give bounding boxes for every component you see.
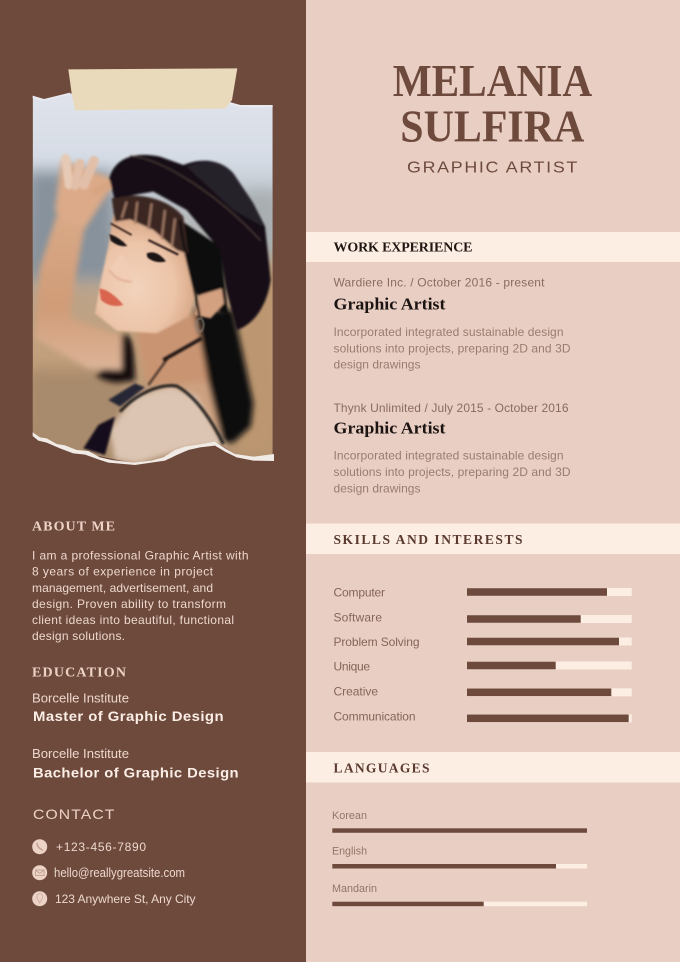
torn paper bottom edge (33, 432, 274, 465)
torn paper top edge (33, 93, 273, 108)
panel: page background (306, 0, 680, 962)
education entry: master (32, 691, 224, 724)
heading: about me: ABOUT ME (32, 520, 115, 534)
job entry: Wardiere: Incorporated integrated sustainable design (334, 325, 564, 339)
job entry: Thynk: solutions into projects, preparing 2D and 3D (334, 465, 571, 479)
text block: about me: design. Proven ability to transform (32, 597, 226, 611)
title: name (393, 55, 592, 152)
section band: work experience: WORK EXPERIENCE (334, 240, 472, 255)
job entry: Wardiere (334, 276, 571, 372)
icon: envelope (32, 865, 47, 880)
education entry: master: Master of Graphic Design (33, 709, 224, 724)
education entry: bachelor: Bachelor of Graphic Design (33, 766, 239, 780)
job entry: Thynk: design drawings (334, 481, 420, 495)
section band: skills and interests: SKILLS AND INTERESTS (334, 532, 522, 547)
job entry: Wardiere: Graphic Artist (334, 294, 446, 313)
text block: about me: management, advertisement, and (32, 581, 213, 595)
contact: email: hello@reallygreatsite.com (54, 866, 185, 880)
skill bars chart: Unique (334, 660, 370, 674)
skill bars chart (334, 586, 632, 724)
skill bars chart: Communication (334, 710, 416, 724)
panel: left sidebar (0, 0, 306, 962)
title: name: MELANIA (393, 55, 592, 106)
contact: address: 123 Anywhere St, Any City (55, 892, 196, 906)
language bars chart: Mandarin (332, 883, 377, 895)
subtitle: role: GRAPHIC ARTIST (407, 160, 579, 177)
job entry: Wardiere: Wardiere Inc. / October 2016 - present (334, 276, 545, 290)
job entry: Thynk (334, 401, 571, 495)
education entry: master: Borcelle Institute (32, 691, 129, 706)
photo: portrait of woman in hat with torn paper edges (27, 68, 280, 465)
title: name: SULFIRA (400, 101, 584, 152)
skill bars chart: Creative (334, 685, 378, 699)
washi tape (68, 68, 237, 110)
education entry: bachelor (32, 746, 239, 780)
text block: about me (32, 548, 248, 643)
education entry: bachelor: Borcelle Institute (32, 746, 129, 761)
heading: education: EDUCATION (32, 666, 126, 680)
job entry: Wardiere: solutions into projects, preparing 2D and 3D (334, 341, 571, 355)
contact: phone: +123-456-7890 (56, 840, 146, 854)
text block: about me: I am a professional Graphic Artist with (32, 548, 248, 562)
language bars chart: English (332, 846, 367, 858)
section band: skills and interests (306, 524, 680, 554)
icon: location pin (32, 891, 47, 906)
job entry: Thynk: Graphic Artist (334, 418, 446, 437)
job entry: Thynk: Incorporated integrated sustainable design (334, 449, 564, 463)
skill bars chart: Computer (334, 586, 385, 600)
text block: about me: client ideas into beautiful, functional (32, 613, 234, 627)
section band: work experience (306, 232, 680, 262)
job entry: Wardiere: design drawings (334, 358, 420, 372)
text block: about me: design solutions. (32, 629, 125, 643)
text block: about me: 8 years of experience in project (32, 565, 214, 579)
section band: languages: LANGUAGES (334, 760, 430, 775)
icon: phone (32, 839, 47, 854)
language bars chart (332, 810, 587, 906)
job entry: Thynk: Thynk Unlimited / July 2015 - October 2016 (334, 401, 569, 415)
section band: languages (306, 752, 680, 782)
heading: contact: CONTACT (33, 806, 115, 822)
language bars chart: Korean (332, 810, 367, 822)
skill bars chart: Software (334, 610, 382, 624)
skill bars chart: Problem Solving (334, 635, 420, 649)
